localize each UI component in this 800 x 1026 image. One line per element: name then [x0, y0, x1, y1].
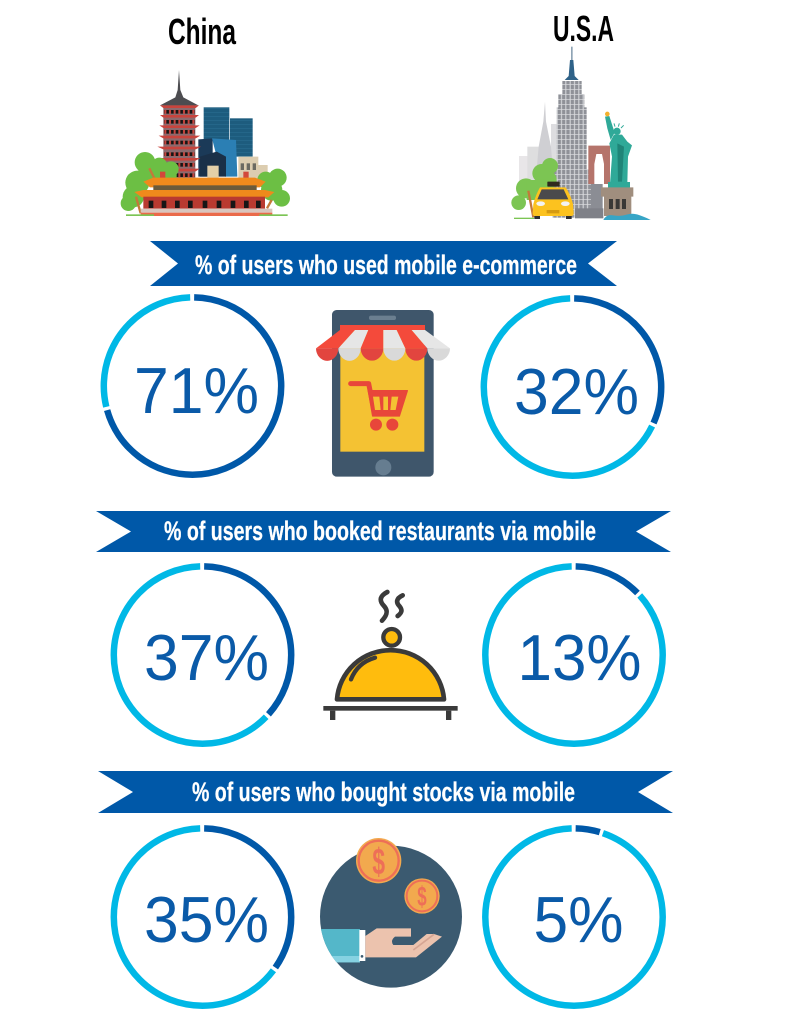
- banner: booked restaurants: % of users who booked restaurants via mobile: [164, 516, 596, 546]
- icon: hand with coins: $: [372, 842, 385, 882]
- donut: China 35%: 35%: [144, 883, 269, 956]
- donut: U.S.A 13%: [485, 566, 663, 744]
- statue of liberty: [605, 116, 632, 188]
- heading: U.S.A: U.S.A: [553, 8, 614, 49]
- icon: mobile shop: [316, 310, 450, 477]
- donut: China 71%: 71%: [134, 354, 259, 427]
- donut: China 37%: [114, 566, 291, 744]
- donut: U.S.A 32%: [484, 298, 661, 476]
- icon: hand with coins: [320, 838, 462, 988]
- banner: bought stocks: [98, 771, 673, 813]
- illustration: China skyline: [121, 70, 290, 216]
- donut: U.S.A 5%: 5%: [534, 883, 624, 956]
- donut: U.S.A 32%: 32%: [514, 355, 639, 428]
- banner: mobile e-commerce: % of users who used mobile e-commerce: [195, 250, 577, 280]
- donut: China 35%: [114, 828, 291, 1006]
- illustration: U.S.A skyline: [511, 47, 651, 220]
- banner: bought stocks: % of users who bought stocks via mobile: [192, 777, 575, 807]
- icon: shopping cart: [351, 384, 407, 431]
- donut: China 71%: [104, 297, 281, 475]
- donut: U.S.A 13%: 13%: [518, 621, 642, 694]
- icon: food cloche: [323, 592, 458, 720]
- donut: China 37%: 37%: [144, 621, 269, 694]
- heading: China: China: [168, 11, 237, 52]
- donut: U.S.A 5%: [485, 828, 663, 1006]
- icon: hand with coins: $: [417, 881, 427, 912]
- banner: mobile e-commerce: [150, 241, 617, 286]
- banner: booked restaurants: [96, 511, 671, 552]
